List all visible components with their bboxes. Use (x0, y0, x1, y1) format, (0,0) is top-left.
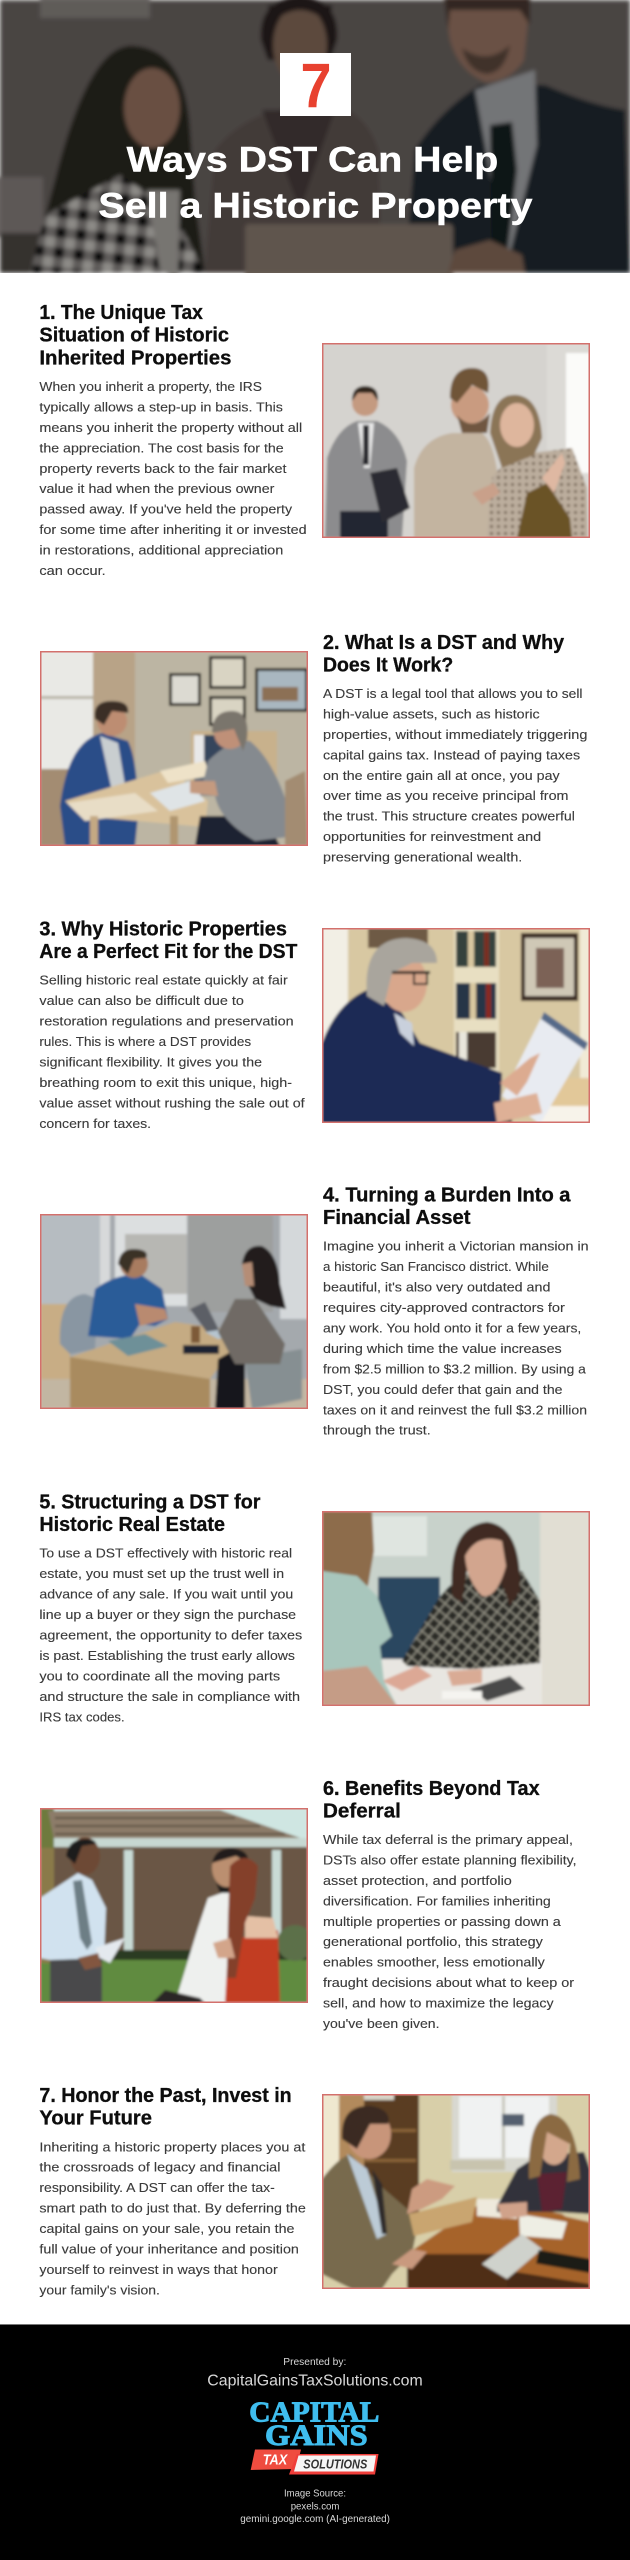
text block 1: property reverts back to the fair market (39, 461, 287, 476)
image source credits (240, 2488, 390, 2525)
text block 5: advance of any sale. If you wait until you (39, 1587, 293, 1602)
text block 4: from $2.5 million to $3.2 million. By using a (323, 1361, 587, 1376)
text block 6: DSTs also offer estate planning flexibility, (323, 1852, 576, 1867)
text block 4: Imagine you inherit a Victorian mansion in (323, 1239, 589, 1254)
photo: couple with agent outside a house (40, 1808, 313, 2003)
presented by text (207, 2356, 423, 2389)
text block 6: While tax deferral is the primary appeal, (323, 1832, 573, 1847)
heading 4: Financial Asset (323, 1207, 471, 1229)
header photo: three professionals, darkened (0, 0, 630, 284)
photo: office consultation across a wooden desk (322, 2094, 593, 2289)
heading 5: Historic Real Estate (39, 1514, 225, 1536)
text block 5 (39, 1546, 303, 1724)
text block 2 (323, 686, 587, 865)
number badge: 7 (280, 52, 351, 122)
text block 5: and structure the sale in compliance with (39, 1689, 300, 1704)
panel: section 4 (40, 1184, 589, 1438)
text block 2: A DST is a legal tool that allows you to sell (323, 686, 583, 701)
text block 2: capital gains tax. Instead of paying taxes (323, 747, 581, 762)
text block 1: can occur. (39, 563, 106, 578)
text block 5: line up a buyer or they sign the purchase (39, 1607, 296, 1622)
text block 5: agreement, the opportunity to defer taxes (39, 1628, 303, 1642)
heading 2 (323, 632, 565, 677)
text block 1: for some time after inheriting it or invested (39, 522, 307, 537)
heading 2: 2. What Is a DST and Why (323, 632, 565, 654)
heading 7 (39, 2085, 292, 2130)
heading 1: Situation of Historic (39, 325, 229, 347)
text block 5: you to coordinate all the moving parts (39, 1668, 281, 1683)
heading 7: 7. Honor the Past, Invest in (39, 2085, 292, 2107)
text block 2: the trust. This structure creates powerful (323, 809, 575, 824)
text block 6: enables smoother, less emotionally (323, 1955, 545, 1970)
text block 2: high-value assets, such as historic (323, 706, 540, 721)
text block 3: significant flexibility. It gives you the (39, 1054, 262, 1070)
title (98, 141, 533, 226)
title: Sell a Historic Property (98, 187, 533, 226)
logo: Capital Gains Tax Solutions: GAINS (265, 2419, 368, 2452)
text block 5: estate, you must set up the trust well in (39, 1566, 284, 1581)
heading 1: 1. The Unique Tax (39, 302, 203, 324)
text block 6: diversification. For families inheriting (323, 1893, 551, 1908)
text block 2: properties, without immediately triggering (323, 727, 587, 742)
text block 3: value can also be difficult due to (39, 993, 244, 1008)
text block 4: a historic San Francisco district. While (323, 1259, 549, 1274)
text block 7: Inheriting a historic property places you at (39, 2139, 306, 2154)
text block 6: fraught decisions about what to keep or (323, 1975, 575, 1990)
text block 1 (39, 379, 307, 578)
heading 3: 3. Why Historic Properties (39, 918, 287, 940)
text block 3: concern for taxes. (39, 1116, 151, 1131)
panel: section 5 (39, 1491, 590, 1724)
text block 1: means you inherit the property without all (39, 420, 302, 435)
photo: older man reading a document (322, 928, 590, 1124)
logo: Capital Gains Tax Solutions: TAX (263, 2451, 288, 2468)
logo: Capital Gains Tax Solutions: CAPITAL (249, 2397, 379, 2429)
text block 4: through the trust. (323, 1423, 431, 1438)
heading 5 (39, 1491, 261, 1536)
logo: Capital Gains Tax Solutions: SOLUTIONS (303, 2457, 368, 2472)
text block 5: To use a DST effectively with historic real (39, 1546, 292, 1561)
text block 3 (39, 973, 305, 1131)
text block 5: IRS tax codes. (39, 1709, 125, 1724)
text block 1: passed away. If you've held the property (39, 502, 293, 517)
image source credits: Image Source: (284, 2488, 346, 2500)
text block 5: is past. Establishing the trust early allows (39, 1648, 295, 1663)
text block 7: responsibility. A DST can offer the tax- (39, 2180, 275, 2195)
panel: section 2 (40, 632, 587, 865)
text block 6: multiple properties or passing down a (323, 1914, 562, 1929)
text block 1: in restorations, additional appreciation (39, 543, 283, 558)
heading 4: 4. Turning a Burden Into a (323, 1184, 571, 1206)
text block 4: during which time the value increases (323, 1341, 562, 1356)
text block 7: yourself to reinvest in ways that honor (39, 2262, 278, 2277)
heading 6: Deferral (323, 1801, 401, 1823)
heading 5: 5. Structuring a DST for (39, 1491, 261, 1513)
text block 1: typically allows a step-up in basis. This (39, 399, 283, 414)
text block 4: requires city-approved contractors for (323, 1300, 566, 1315)
text block 7: your family's vision. (39, 2282, 160, 2297)
photo: woman reviewing paperwork (322, 1511, 590, 1706)
text block 6: sell, and how to maximize the legacy (323, 1996, 554, 2011)
text block 7: smart path to do just that. By deferring the (39, 2201, 306, 2216)
text block 6: asset protection, and portfolio (323, 1873, 512, 1888)
text block 3: rules. This is where a DST provides (39, 1034, 252, 1049)
text block 1: value it had when the previous owner (39, 481, 275, 496)
text block 2: over time as you receive principal from (323, 788, 568, 803)
heading 6 (323, 1778, 540, 1823)
heading 1 (39, 302, 231, 369)
text block 4: DST, you could defer that gain and the (323, 1382, 562, 1397)
photo: desk meeting by a window (40, 1214, 308, 1409)
text block 6: you've been given. (323, 2016, 440, 2031)
header banner (0, 0, 630, 284)
panel: section 7 (39, 2085, 593, 2297)
text block 4: any work. You hold onto it for a few years, (323, 1320, 581, 1336)
panel: section 3 (39, 918, 590, 1131)
text block 4: beautiful, it's also very outdated and (323, 1280, 550, 1295)
presented by text: CapitalGainsTaxSolutions.com (207, 2372, 423, 2389)
photo: couple with advisor (322, 343, 590, 541)
text block 3: breathing room to exit this unique, high- (39, 1075, 292, 1090)
text block 3: Selling historic real estate quickly at fair (39, 973, 288, 988)
text block 3: value asset without rushing the sale out of (39, 1095, 305, 1110)
photo: advisor meeting with client (40, 651, 308, 846)
heading 2: Does It Work? (323, 655, 453, 677)
text block 7: the crossroads of legacy and financial (39, 2160, 281, 2175)
text block 6 (323, 1832, 576, 2031)
number badge: 7: 7 (300, 52, 332, 122)
footer (0, 2324, 630, 2560)
text block 7: capital gains on your sale, you retain the (39, 2221, 295, 2236)
text block 2: on the entire gain all at once, you pay (323, 768, 560, 783)
text block 7: full value of your inheritance and position (39, 2242, 299, 2256)
panel: section 1 (39, 302, 590, 578)
heading 6: 6. Benefits Beyond Tax (323, 1778, 540, 1800)
presented by text: Presented by: (283, 2356, 346, 2368)
text block 4: taxes on it and reinvest the full $3.2 million (323, 1402, 587, 1417)
heading 4 (323, 1184, 571, 1229)
title: Ways DST Can Help (127, 141, 498, 180)
text block 1: When you inherit a property, the IRS (39, 379, 262, 394)
text block 7 (39, 2139, 306, 2297)
heading 3: Are a Perfect Fit for the DST (39, 941, 297, 963)
panel: section 6 (40, 1778, 576, 2031)
logo: Capital Gains Tax Solutions (249, 2397, 379, 2474)
image source credits: gemini.google.com (AI-generated) (240, 2513, 390, 2525)
text block 4 (323, 1239, 589, 1438)
text block 2: preserving generational wealth. (323, 850, 522, 865)
image source credits: pexels.com (291, 2500, 340, 2512)
text block 3: restoration regulations and preservation (39, 1014, 294, 1029)
text block 2: opportunities for reinvestment and (323, 829, 541, 844)
text block 6: generational portfolio, this strategy (323, 1934, 543, 1949)
heading 7: Your Future (39, 2108, 152, 2130)
heading 3 (39, 918, 297, 963)
text block 1: the appreciation. The cost basis for the (39, 440, 284, 455)
heading 1: Inherited Properties (39, 347, 231, 369)
